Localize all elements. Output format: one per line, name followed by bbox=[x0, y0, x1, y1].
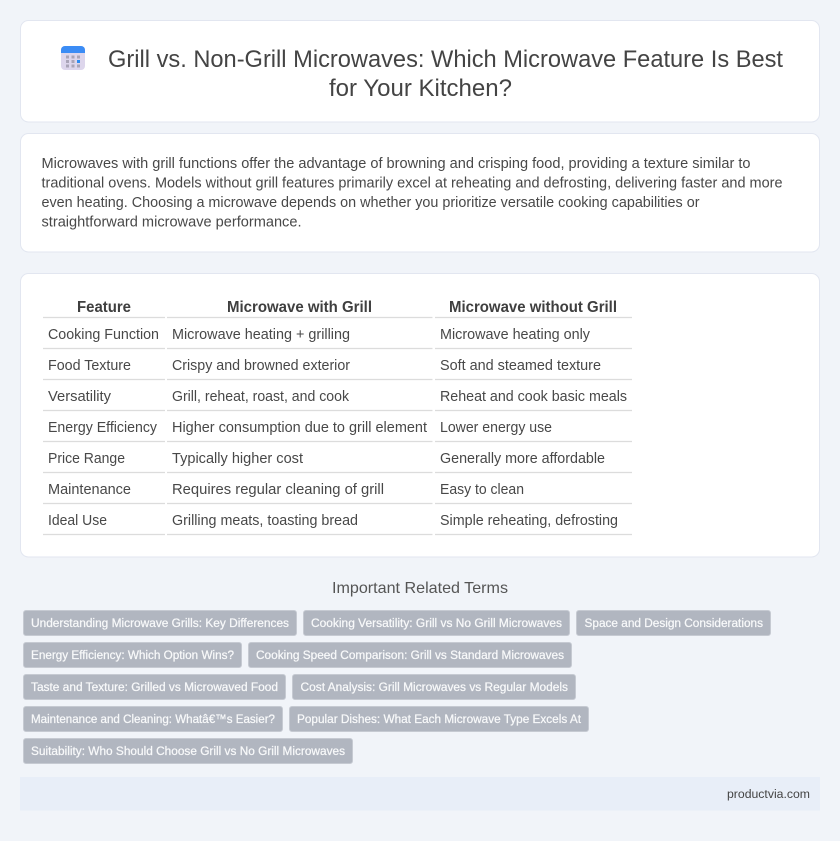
row: ideal use: Ideal Use bbox=[48, 513, 107, 529]
tag: Energy Efficiency: Which Option Wins? bbox=[31, 648, 234, 662]
tag bbox=[24, 642, 242, 668]
tag bbox=[248, 642, 572, 668]
row: food texture: Soft and steamed texture bbox=[440, 358, 601, 374]
footer: productvia.com bbox=[727, 787, 810, 801]
tag bbox=[292, 674, 576, 700]
tag bbox=[24, 738, 352, 764]
row: versatility: Reheat and cook basic meals bbox=[440, 389, 627, 405]
table header: Microwave without Grill bbox=[449, 299, 617, 316]
tag bbox=[576, 610, 770, 636]
title: Grill vs. Non-Grill Microwaves: Which Microwave Feature Is Best bbox=[108, 46, 783, 73]
row: maintenance bbox=[48, 482, 524, 498]
row: versatility: Versatility bbox=[48, 389, 112, 405]
tag bbox=[304, 610, 570, 636]
tag: Taste and Texture: Grilled vs Microwaved Food bbox=[31, 680, 278, 694]
tag: Cost Analysis: Grill Microwaves vs Regular Models bbox=[300, 680, 568, 694]
row: food texture: Crispy and browned exterior bbox=[172, 358, 350, 374]
row: energy efficiency: Lower energy use bbox=[440, 420, 552, 436]
row: price range: Typically higher cost bbox=[172, 451, 303, 467]
icon: calendar grid bbox=[61, 46, 85, 70]
row: ideal use: Simple reheating, defrosting bbox=[440, 513, 618, 529]
tag: Understanding Microwave Grills: Key Differences bbox=[31, 616, 289, 630]
row: maintenance: Easy to clean bbox=[440, 482, 524, 498]
tag bbox=[24, 610, 296, 636]
panel: title card bbox=[20, 20, 820, 122]
row: price range: Generally more affordable bbox=[440, 451, 605, 467]
heading: important related terms: Important Related Terms bbox=[332, 580, 508, 597]
title: for Your Kitchen? bbox=[329, 75, 512, 102]
row: energy efficiency: Energy Efficiency bbox=[48, 420, 158, 436]
tag bbox=[24, 706, 282, 732]
row: energy efficiency bbox=[48, 420, 552, 436]
panel: introduction paragraph: traditional ovens. Models without grill features primarily excel at reheating and defrosting, delivering faster and more bbox=[42, 176, 782, 192]
panel: introduction paragraph: Microwaves with grill functions offer the advantage of browning and crisping food, providing a texture similar to bbox=[42, 156, 750, 172]
row: price range: Price Range bbox=[48, 451, 125, 467]
row: food texture bbox=[48, 358, 601, 374]
row: ideal use: Grilling meats, toasting bread bbox=[172, 513, 358, 529]
panel: introduction paragraph bbox=[20, 134, 820, 252]
row: price range bbox=[48, 451, 605, 467]
tag bbox=[24, 674, 286, 700]
row: cooking function: Cooking Function bbox=[48, 327, 159, 343]
tag: Suitability: Who Should Choose Grill vs No Grill Microwaves bbox=[31, 744, 345, 758]
title bbox=[108, 46, 783, 102]
row: ideal use bbox=[48, 513, 618, 529]
row: maintenance: Requires regular cleaning of grill bbox=[172, 482, 384, 498]
table header bbox=[77, 299, 617, 316]
tag: Maintenance and Cleaning: Whatâ€™s Easier? bbox=[31, 712, 275, 726]
tag: Cooking Versatility: Grill vs No Grill Microwaves bbox=[311, 616, 562, 630]
row: versatility: Grill, reheat, roast, and cook bbox=[172, 389, 350, 405]
table header: Feature bbox=[77, 299, 131, 316]
panel: introduction paragraph: straightforward microwave performance. bbox=[42, 214, 302, 230]
row: cooking function: Microwave heating + grilling bbox=[172, 327, 350, 343]
tag group: related terms bbox=[24, 610, 770, 764]
table header: Microwave with Grill bbox=[227, 299, 372, 316]
row: versatility bbox=[48, 389, 627, 405]
tag: Cooking Speed Comparison: Grill vs Standard Microwaves bbox=[256, 648, 564, 662]
row: energy efficiency: Higher consumption due to grill element bbox=[172, 420, 427, 436]
row: cooking function bbox=[48, 327, 591, 343]
tag: Space and Design Considerations bbox=[584, 616, 763, 630]
footer bbox=[20, 777, 820, 810]
tag: Popular Dishes: What Each Microwave Type Excels At bbox=[297, 712, 582, 726]
panel: comparison table bbox=[20, 274, 820, 557]
tag bbox=[290, 706, 588, 732]
row: food texture: Food Texture bbox=[48, 358, 131, 374]
row: maintenance: Maintenance bbox=[48, 482, 131, 498]
panel: introduction paragraph: even heating. Choosing a microwave depends on whether you prioritize versatile cooking capabilities or bbox=[42, 195, 700, 211]
row: cooking function: Microwave heating only bbox=[440, 327, 591, 343]
